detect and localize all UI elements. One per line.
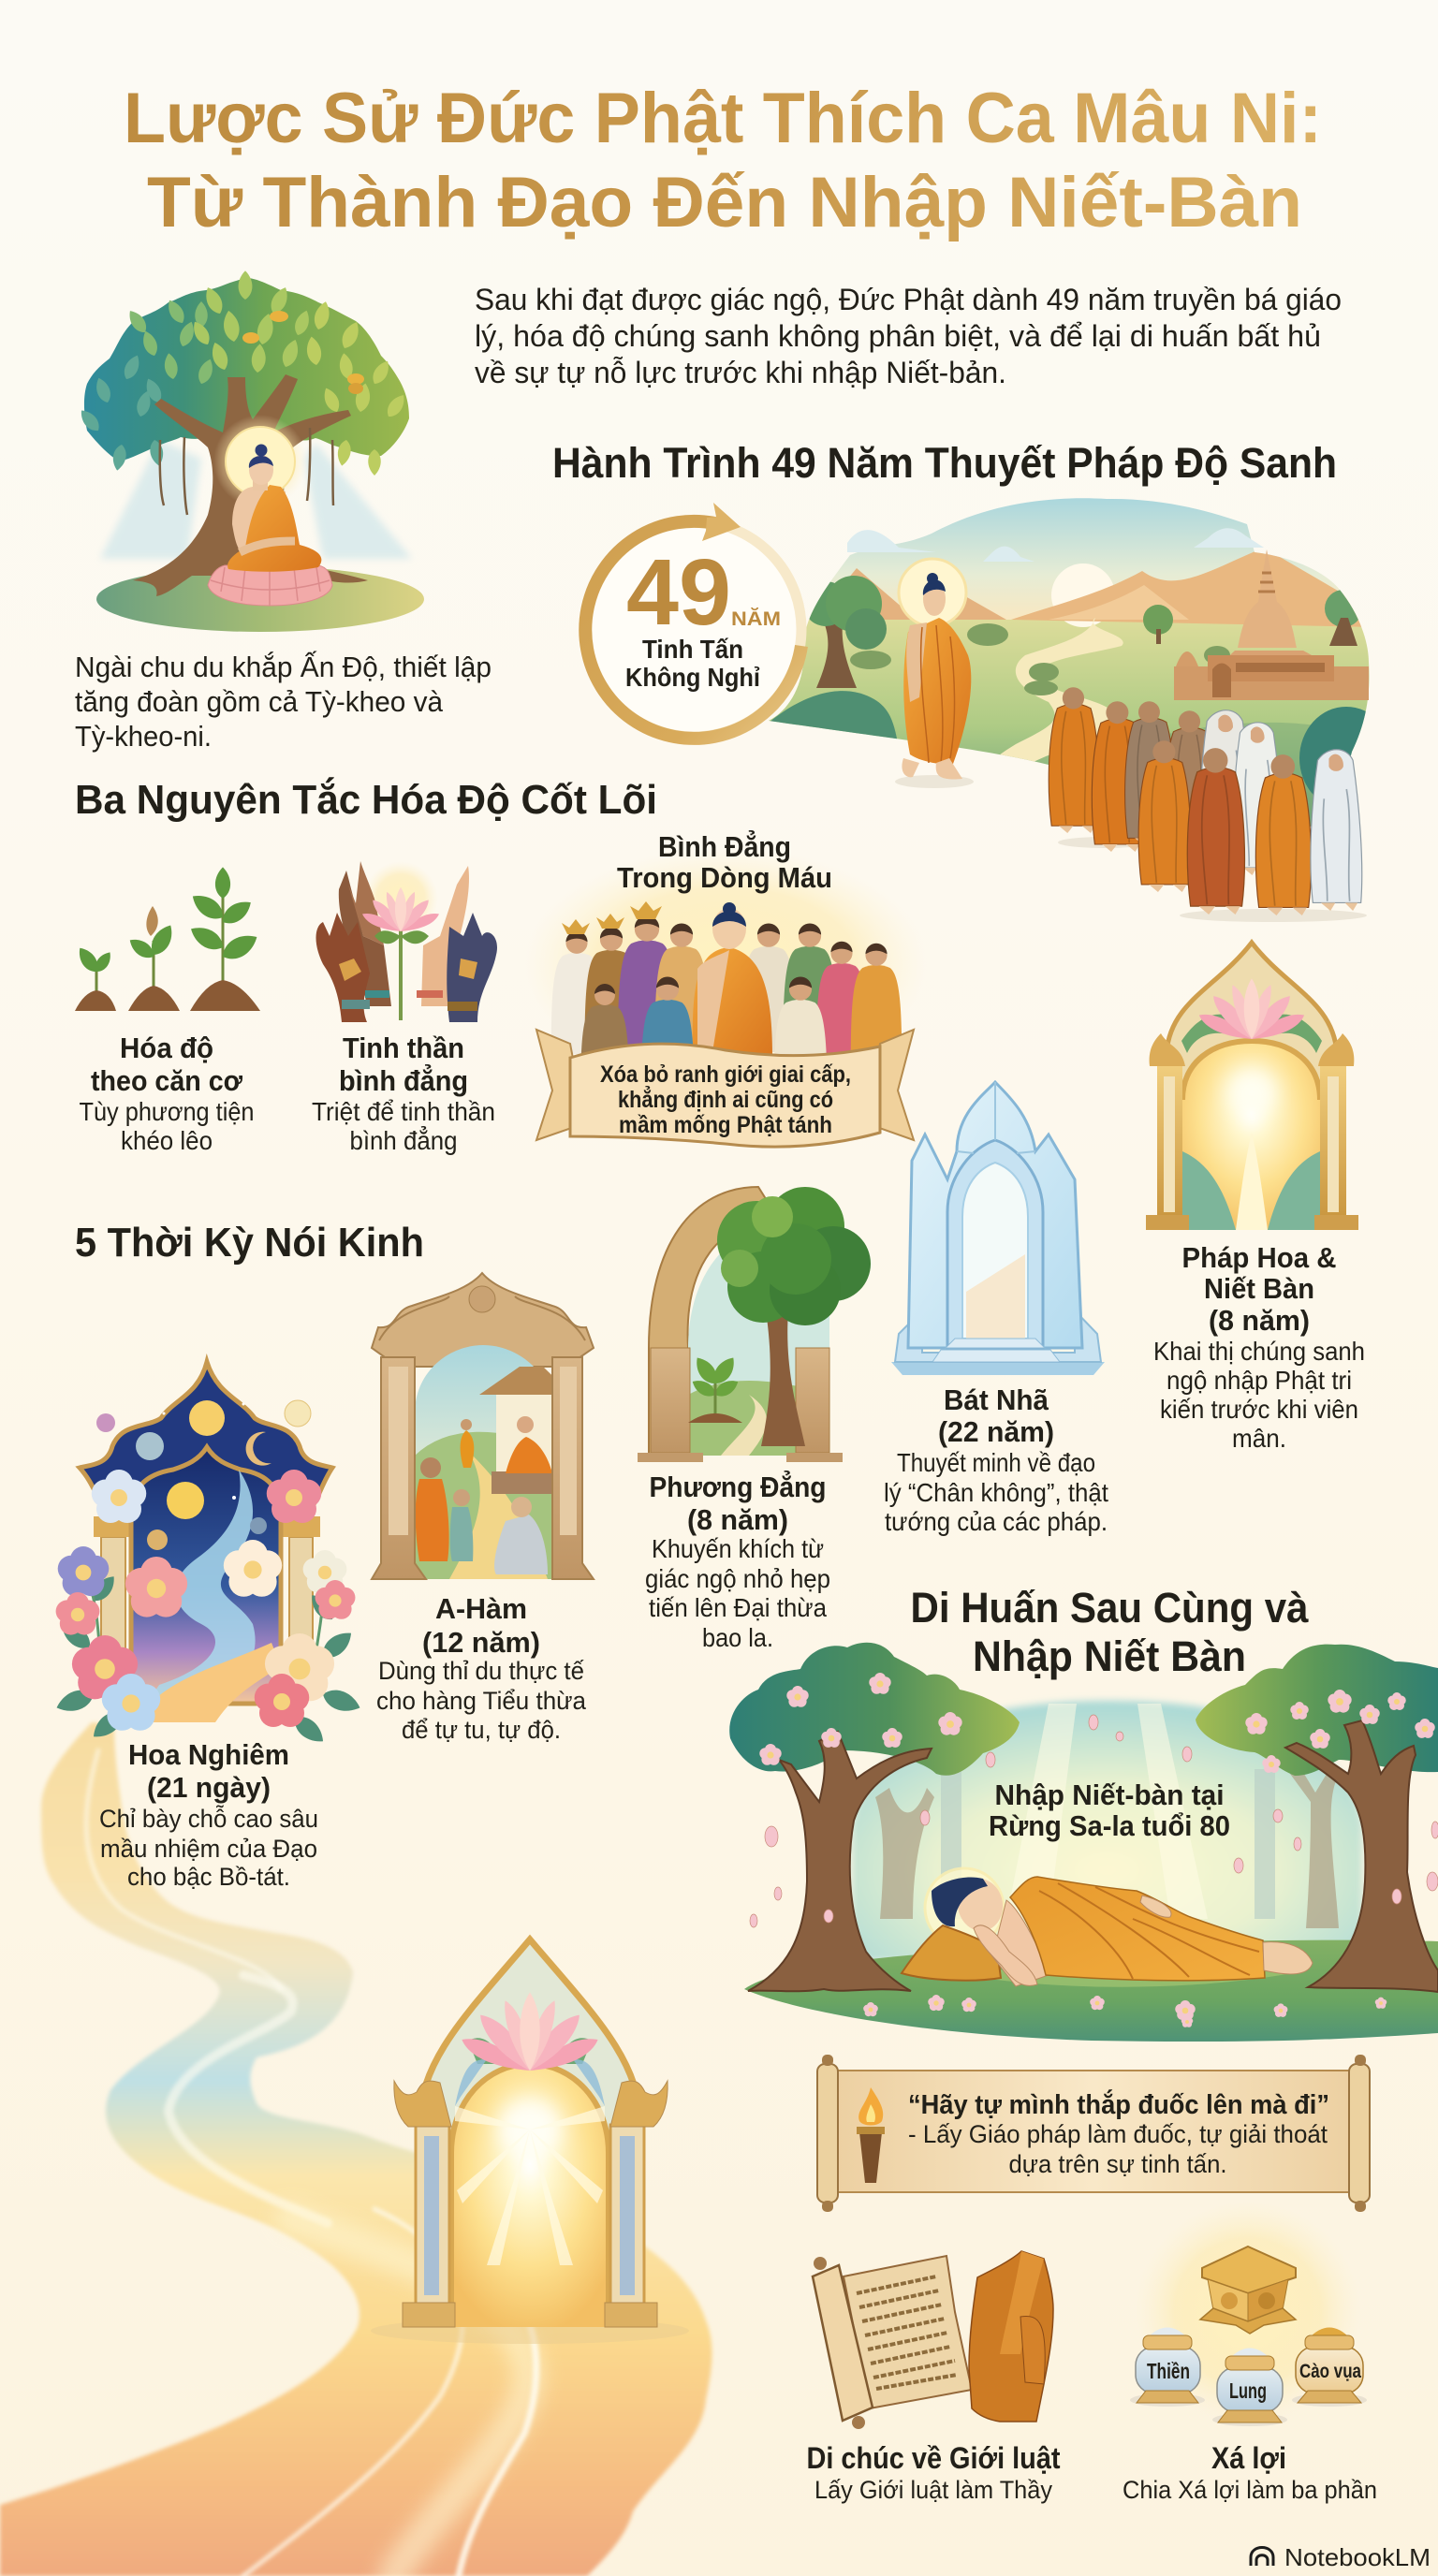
gate: crystal Prajna bbox=[891, 1082, 1105, 1375]
text: Avatamsaka period: mầu nhiệm của Đạo bbox=[100, 1835, 317, 1863]
ground bbox=[744, 1940, 1438, 2042]
text: Lotus and Nirvana period: Niết Bàn bbox=[1204, 1272, 1314, 1305]
heading: equality of blood bbox=[617, 829, 832, 894]
jar: Lung bbox=[1212, 2348, 1287, 2426]
forest backdrop bbox=[852, 1701, 1362, 1961]
text: Prajna period: lý “Chân không”, thật bbox=[884, 1478, 1108, 1507]
text: Vaipulya period: tiến lên Đại thừa bbox=[649, 1593, 827, 1622]
banner: caste boundaries bbox=[536, 1030, 914, 1147]
intro text: Sau khi đạt được giác ngộ, Đức Phật dành 49 năm truyền bá giáo bbox=[475, 283, 1342, 316]
icon: 49 years circular arrow: Không Nghỉ bbox=[625, 663, 760, 692]
path: river of wisdom bbox=[0, 1722, 712, 2576]
text: Agama period: (12 năm) bbox=[422, 1626, 540, 1659]
caption: entering Nirvana: Rừng Sa-la tuổi 80 bbox=[989, 1809, 1230, 1842]
gate: Lotus and Nirvana bbox=[1146, 943, 1358, 1230]
gate: Avatamsaka cosmic arch bbox=[53, 1362, 363, 1748]
text: Agama period bbox=[376, 1592, 587, 1744]
intro text bbox=[475, 283, 1342, 389]
text: teach according to capacity: Hóa độ bbox=[120, 1032, 213, 1064]
jar: Thiền: Thiền bbox=[1147, 2359, 1190, 2383]
text: Avatamsaka period: Hoa Nghiêm bbox=[128, 1738, 289, 1771]
scroll: final words: dựa trên sự tinh tấn. bbox=[1009, 2150, 1226, 2178]
illustration: crowd of all castes with Buddha bbox=[524, 847, 927, 1147]
text: testament on precepts bbox=[807, 2441, 1061, 2504]
text: teach according to capacity: khéo lêo bbox=[121, 1126, 213, 1155]
text: Prajna period bbox=[884, 1383, 1108, 1536]
casket bbox=[1200, 2247, 1296, 2334]
text: Vaipulya period: Khuyến khích từ bbox=[652, 1534, 824, 1563]
text: teach according to capacity: theo căn cơ bbox=[91, 1064, 243, 1097]
jar: Lung: Lung bbox=[1229, 2378, 1267, 2403]
scroll: final words: - Lấy Giáo pháp làm đuốc, tự giải thoát bbox=[908, 2120, 1328, 2148]
right sala tree bbox=[1196, 1645, 1438, 1992]
text: teaching across India: Tỳ-kheo-ni. bbox=[75, 720, 212, 753]
text: spirit of equality: bình đẳng bbox=[339, 1063, 468, 1097]
text: Vaipulya period bbox=[645, 1470, 830, 1652]
path: light streams on the river bbox=[86, 1750, 536, 2576]
heading: final teaching: Nhập Niết Bàn bbox=[973, 1632, 1246, 1680]
title: Từ Thành Đạo Đến Nhập Niết-Bàn bbox=[147, 163, 1302, 242]
icon: growing seedlings bbox=[74, 867, 261, 1011]
text: teaching across India bbox=[75, 651, 492, 753]
illustration: walking Buddha bbox=[895, 559, 974, 788]
scroll: final words bbox=[817, 2055, 1370, 2212]
text: spirit of equality: Tinh thần bbox=[343, 1032, 464, 1064]
icon: torch bbox=[857, 2087, 885, 2183]
text: teach according to capacity: Tùy phương tiện bbox=[79, 1097, 255, 1126]
text: Prajna period: (22 năm) bbox=[938, 1415, 1054, 1448]
text: Avatamsaka period bbox=[99, 1738, 318, 1891]
seated Buddha bbox=[227, 444, 321, 572]
text: Agama period: cho hàng Tiểu thừa bbox=[376, 1687, 587, 1715]
text: Lotus and Nirvana period: ngộ nhập Phật tri bbox=[1167, 1366, 1352, 1395]
text: Lotus and Nirvana period: mân. bbox=[1232, 1424, 1286, 1453]
heading: three principles: Ba Nguyên Tắc Hóa Độ Cốt Lõi bbox=[75, 776, 657, 823]
illustration: monks and nuns bbox=[1049, 687, 1367, 922]
illustration: Sala forest scene bbox=[729, 1643, 1438, 2042]
text: Prajna period: Thuyết minh về đạo bbox=[897, 1448, 1095, 1477]
icon: 49 years circular arrow: NĂM bbox=[731, 608, 781, 630]
jar: Thiền bbox=[1130, 2327, 1205, 2407]
illustration: Buddha under Bodhi tree bbox=[77, 271, 424, 632]
text: teach according to capacity bbox=[79, 1032, 255, 1155]
reclining Buddha bbox=[902, 1868, 1313, 1986]
caption: entering Nirvana: Nhập Niết-bàn tại bbox=[994, 1778, 1225, 1811]
text: Lotus and Nirvana period: (8 năm) bbox=[1209, 1304, 1310, 1337]
heading: five periods: 5 Thời Kỳ Nói Kinh bbox=[75, 1220, 424, 1266]
text: teaching across India: tăng đoàn gồm cả Tỳ-kheo và bbox=[75, 685, 444, 718]
halo bbox=[213, 415, 307, 508]
text: Lotus and Nirvana period: Khai thị chúng sanh bbox=[1153, 1337, 1365, 1366]
text: Lotus and Nirvana period: kiến trước khi viên bbox=[1160, 1395, 1358, 1424]
banner: caste boundaries: mầm mống Phật tánh bbox=[619, 1112, 832, 1138]
gate: Agama village scene bbox=[372, 1273, 594, 1579]
text: testament on precepts: Lấy Giới luật làm Thầy bbox=[814, 2476, 1052, 2504]
text: Agama period: A-Hàm bbox=[435, 1592, 527, 1625]
lotus seat bbox=[208, 565, 332, 606]
text: Agama period: để tự tu, tự độ. bbox=[402, 1716, 561, 1744]
banner: caste boundaries: khẳng định ai cũng có bbox=[618, 1084, 833, 1113]
text: spirit of equality bbox=[312, 1032, 495, 1155]
title: Lược Sử Đức Phật Thích Ca Mâu Ni: bbox=[124, 79, 1322, 158]
jar: Cào vụa: Cào vụa bbox=[1299, 2361, 1361, 2382]
text: testament on precepts: Di chúc về Giới luật bbox=[807, 2441, 1061, 2475]
text: spirit of equality: bình đẳng bbox=[350, 1125, 457, 1155]
gate: arch with tree bbox=[638, 1187, 871, 1462]
text: relics: Chia Xá lợi làm ba phần bbox=[1123, 2476, 1377, 2504]
gate: golden lotus arch bbox=[371, 1939, 689, 2344]
text: Avatamsaka period: Chỉ bày chỗ cao sâu bbox=[99, 1804, 318, 1833]
scroll: final words: “Hãy tự mình thắp đuốc lên mà đi” bbox=[908, 2088, 1329, 2120]
icon: hands holding lotus bbox=[316, 861, 497, 1022]
text: Vaipulya period: giác ngộ nhỏ hẹp bbox=[645, 1564, 830, 1593]
text: Vaipulya period: Phương Đẳng bbox=[650, 1470, 826, 1503]
text: teaching across India: Ngài chu du khắp Ấn Độ, thiết lập bbox=[75, 651, 492, 683]
flowers around the arch bbox=[53, 1470, 363, 1748]
left sala tree bbox=[729, 1643, 1020, 1991]
canopy bbox=[77, 271, 409, 476]
illustration: relic casket and jars bbox=[1130, 2200, 1367, 2426]
heading: final teaching bbox=[910, 1584, 1309, 1680]
heading: equality of blood: Trong Dòng Máu bbox=[617, 861, 832, 894]
text: Prajna period: Bát Nhã bbox=[944, 1383, 1049, 1416]
icon: 49 years circular arrow: 49 bbox=[626, 540, 731, 645]
logo: NotebookLM: NotebookLM bbox=[1284, 2543, 1431, 2571]
icon: 49 years circular arrow bbox=[585, 503, 802, 739]
intro text: về sự tự nỗ lực trước khi nhập Niết-bản. bbox=[475, 356, 1006, 389]
text: Prajna period: tướng của các pháp. bbox=[885, 1507, 1108, 1536]
heading: 49-year journey: Hành Trình 49 Năm Thuyết Pháp Độ Sanh bbox=[552, 439, 1337, 487]
text: Vaipulya period: (8 năm) bbox=[687, 1503, 788, 1536]
text: spirit of equality: Triệt để tinh thần bbox=[312, 1097, 495, 1126]
jar: Cào vụa bbox=[1292, 2327, 1367, 2407]
text: Vaipulya period: bao la. bbox=[702, 1623, 773, 1652]
title bbox=[124, 79, 1322, 242]
illustration: scroll and robe bbox=[813, 2251, 1053, 2429]
caption: entering Nirvana bbox=[989, 1778, 1230, 1842]
text: relics bbox=[1123, 2441, 1377, 2504]
illustration: landscape with temple bbox=[768, 496, 1393, 833]
icon: 49 years circular arrow: Tinh Tấn bbox=[642, 635, 743, 664]
heading: equality of blood: Bình Đẳng bbox=[658, 829, 791, 863]
text: Avatamsaka period: cho bậc Bồ-tát. bbox=[127, 1863, 290, 1891]
text: Avatamsaka period: (21 ngày) bbox=[147, 1771, 271, 1804]
intro text: lý, hóa độ chúng sanh không phân biệt, và để lại di huấn bất hủ bbox=[475, 319, 1321, 353]
temple bbox=[1174, 549, 1369, 700]
text: relics: Xá lợi bbox=[1211, 2441, 1286, 2475]
text: Agama period: Dùng thỉ du thực tế bbox=[378, 1657, 584, 1685]
text: Lotus and Nirvana period: Pháp Hoa & bbox=[1181, 1241, 1337, 1274]
banner: caste boundaries: Xóa bỏ ranh giới giai cấp, bbox=[600, 1061, 851, 1088]
heading: final teaching: Di Huấn Sau Cùng và bbox=[910, 1584, 1309, 1632]
text: Lotus and Nirvana period bbox=[1153, 1241, 1365, 1453]
